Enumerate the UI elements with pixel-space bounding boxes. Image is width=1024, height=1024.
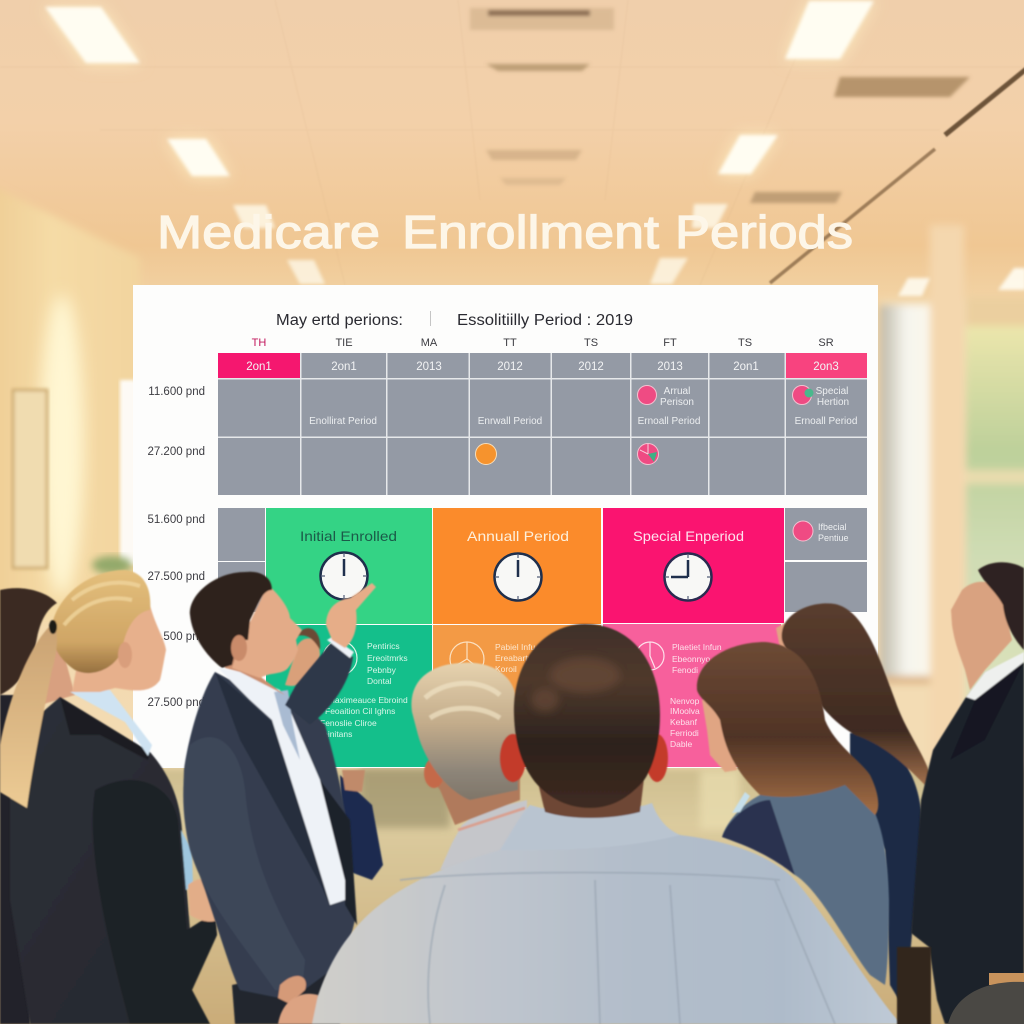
description text: Nenvop bbox=[670, 696, 700, 706]
ear bbox=[231, 635, 247, 661]
icon: clock bbox=[494, 554, 542, 600]
column headers: TS bbox=[738, 337, 752, 349]
cell labels: Ernoall Period bbox=[795, 416, 857, 427]
description text: Ibeinitans bbox=[316, 729, 352, 739]
trousers bbox=[232, 960, 345, 1024]
person: gray-blond man bbox=[411, 663, 527, 870]
hair bbox=[697, 642, 878, 815]
ceiling tile lines bbox=[0, 0, 1024, 285]
ceiling vents bbox=[470, 8, 970, 203]
icon: pink special dot bbox=[792, 386, 814, 404]
hand pointing bbox=[326, 583, 376, 648]
year labels: 2012 bbox=[578, 361, 604, 373]
title: Enrollment bbox=[402, 206, 659, 258]
person: long-haired woman right bbox=[776, 603, 930, 1015]
jacket bbox=[722, 780, 889, 985]
cell labels: Special bbox=[816, 386, 848, 397]
cell labels bbox=[309, 386, 857, 427]
row labels bbox=[147, 386, 205, 709]
year labels: 2013 bbox=[657, 361, 683, 373]
year labels: 2on3 bbox=[813, 361, 839, 373]
title: Periods bbox=[675, 206, 853, 258]
board heading: Essolitiilly Period : 2019 bbox=[457, 312, 633, 329]
person: presenter bbox=[183, 572, 376, 1024]
lower left gray cells bbox=[218, 508, 265, 612]
jacket bbox=[184, 672, 355, 1000]
panel: special period bbox=[603, 508, 784, 767]
description text: Ebeonnyo bbox=[672, 654, 711, 664]
ceiling lights bbox=[45, 1, 1024, 296]
cell labels: Enrwall Period bbox=[478, 416, 542, 427]
neck bbox=[225, 640, 285, 695]
cell labels: Hertion bbox=[817, 397, 849, 408]
raised arm bbox=[285, 643, 353, 725]
right gray cells bbox=[785, 508, 867, 612]
low hand bbox=[278, 976, 306, 1004]
hand bbox=[188, 879, 228, 922]
panel: annual period: Annuall Period bbox=[467, 528, 569, 544]
description text: Pebnby bbox=[367, 665, 397, 675]
cell labels: Arrual bbox=[664, 386, 690, 397]
row labels: 27.500 pnd bbox=[147, 571, 205, 583]
description text: Ereoitmrks bbox=[367, 653, 408, 663]
panel: initial enrollment bbox=[266, 508, 432, 767]
description text: Plaetiet Infun bbox=[672, 642, 722, 652]
row labels: 51.600 pnd bbox=[147, 514, 205, 526]
wall glow bbox=[40, 295, 84, 595]
cell labels: Enollirat Period bbox=[309, 416, 377, 427]
description text: Wiaximeauce Ebroind bbox=[325, 695, 408, 705]
description text: Dable bbox=[670, 739, 692, 749]
description text: IMoolva bbox=[670, 706, 700, 716]
person: man from behind bbox=[278, 624, 901, 1024]
panel: enrollment board bbox=[133, 285, 878, 768]
description text bbox=[316, 641, 408, 739]
ceiling beam lines bbox=[770, 66, 1024, 283]
column headers bbox=[252, 337, 834, 349]
ears bbox=[500, 734, 526, 782]
year labels: 2on1 bbox=[331, 361, 357, 373]
column headers: TT bbox=[503, 337, 517, 349]
hair tie bbox=[49, 620, 57, 634]
face bbox=[232, 585, 302, 678]
year labels: 2013 bbox=[416, 361, 442, 373]
jacket right edge bbox=[320, 780, 357, 925]
right wall and windows bbox=[880, 225, 1024, 770]
person: far left man bbox=[0, 588, 75, 1024]
calendar grid bbox=[218, 353, 867, 495]
title bbox=[157, 206, 853, 258]
description text: Kebanf bbox=[670, 717, 698, 727]
year labels: 2012 bbox=[497, 361, 523, 373]
icon: clock bbox=[664, 554, 712, 600]
row labels: 27.500 pnd bbox=[147, 697, 205, 709]
column headers: TH bbox=[252, 337, 266, 349]
face bbox=[72, 605, 166, 692]
year labels: 2on1 bbox=[733, 361, 759, 373]
icon: clock bbox=[320, 552, 368, 600]
panel: initial enrollment: Initial Enrolled bbox=[300, 528, 397, 544]
icon: orange dot bbox=[476, 444, 496, 464]
cell labels: Ernoall Period bbox=[638, 416, 700, 427]
column headers: FT bbox=[663, 337, 677, 349]
year labels bbox=[246, 361, 839, 373]
floor bbox=[0, 768, 1024, 1024]
left wall bbox=[0, 180, 140, 620]
year labels: 2on1 bbox=[246, 361, 272, 373]
board heading: May ertd perions: bbox=[276, 312, 403, 329]
lapel bbox=[215, 672, 330, 905]
icon: mixed pie dot bbox=[638, 444, 658, 464]
description text: Fenoslie Cliroe bbox=[320, 718, 377, 728]
icon: pink annual dot bbox=[638, 386, 656, 404]
sleeve bbox=[183, 737, 305, 990]
description text: Dontal bbox=[367, 676, 392, 686]
column headers: SR bbox=[818, 337, 834, 349]
person: blonde woman bbox=[0, 570, 228, 1024]
column headers: TIE bbox=[335, 337, 353, 349]
description text: Koroil bbox=[495, 664, 517, 674]
description text bbox=[495, 642, 535, 674]
column headers: TS bbox=[584, 337, 598, 349]
ear bbox=[118, 642, 132, 668]
jacket bbox=[10, 697, 217, 1024]
shirt bbox=[310, 803, 901, 1024]
title: Medicare bbox=[157, 206, 380, 258]
person: brown-haired woman bbox=[697, 642, 889, 985]
neck bbox=[535, 770, 645, 818]
description text: Pentirics bbox=[367, 641, 400, 651]
panel: special period: Special Enperiod bbox=[633, 528, 744, 544]
shirt folds bbox=[400, 872, 835, 1024]
hair bbox=[52, 570, 150, 673]
board heading bbox=[276, 311, 633, 329]
tie bbox=[274, 690, 300, 760]
row labels: 1.500 pnd bbox=[154, 631, 205, 643]
blouse collar bbox=[732, 792, 750, 813]
plant bbox=[92, 556, 132, 574]
description text: Feoaition Cil Ighns bbox=[325, 706, 395, 716]
ceiling light glow bbox=[43, 0, 876, 178]
right gray cells: Pentiue bbox=[818, 533, 849, 543]
panel: annual period bbox=[433, 508, 601, 767]
row labels: 27.200 pnd bbox=[147, 446, 205, 458]
description text: Fenodi bbox=[672, 665, 698, 675]
cuff bbox=[327, 637, 354, 658]
ponytail bbox=[0, 622, 57, 808]
shirt bbox=[218, 668, 345, 905]
icon: outline clock bbox=[323, 641, 357, 675]
right gray cells: Ifbecial bbox=[818, 522, 847, 532]
blue folder bbox=[181, 830, 193, 890]
jacket shoulder bbox=[722, 800, 795, 875]
icon: outline clock bbox=[636, 642, 664, 670]
column headers: MA bbox=[421, 337, 438, 349]
head hair bbox=[514, 624, 660, 808]
description text bbox=[670, 642, 722, 749]
table and chair corner bbox=[897, 947, 1024, 1024]
row labels: 11.600 pnd bbox=[148, 386, 205, 398]
person: woman behind presenter bbox=[285, 628, 383, 880]
hair bbox=[190, 572, 272, 668]
wall picture bbox=[13, 390, 47, 568]
hand bbox=[278, 994, 318, 1024]
collar bbox=[70, 690, 152, 756]
description text: Ereabarty bbox=[495, 653, 533, 663]
icon: outline clock bbox=[450, 642, 484, 676]
cell labels: Perison bbox=[660, 397, 694, 408]
board halo bbox=[120, 380, 136, 565]
description text: Ferriodi bbox=[670, 728, 699, 738]
face bbox=[702, 700, 737, 772]
description text: Pabiel Infu bbox=[495, 642, 535, 652]
collar band bbox=[500, 803, 680, 850]
hair highlights bbox=[531, 657, 620, 712]
person: right man in suit bbox=[911, 562, 1024, 1024]
